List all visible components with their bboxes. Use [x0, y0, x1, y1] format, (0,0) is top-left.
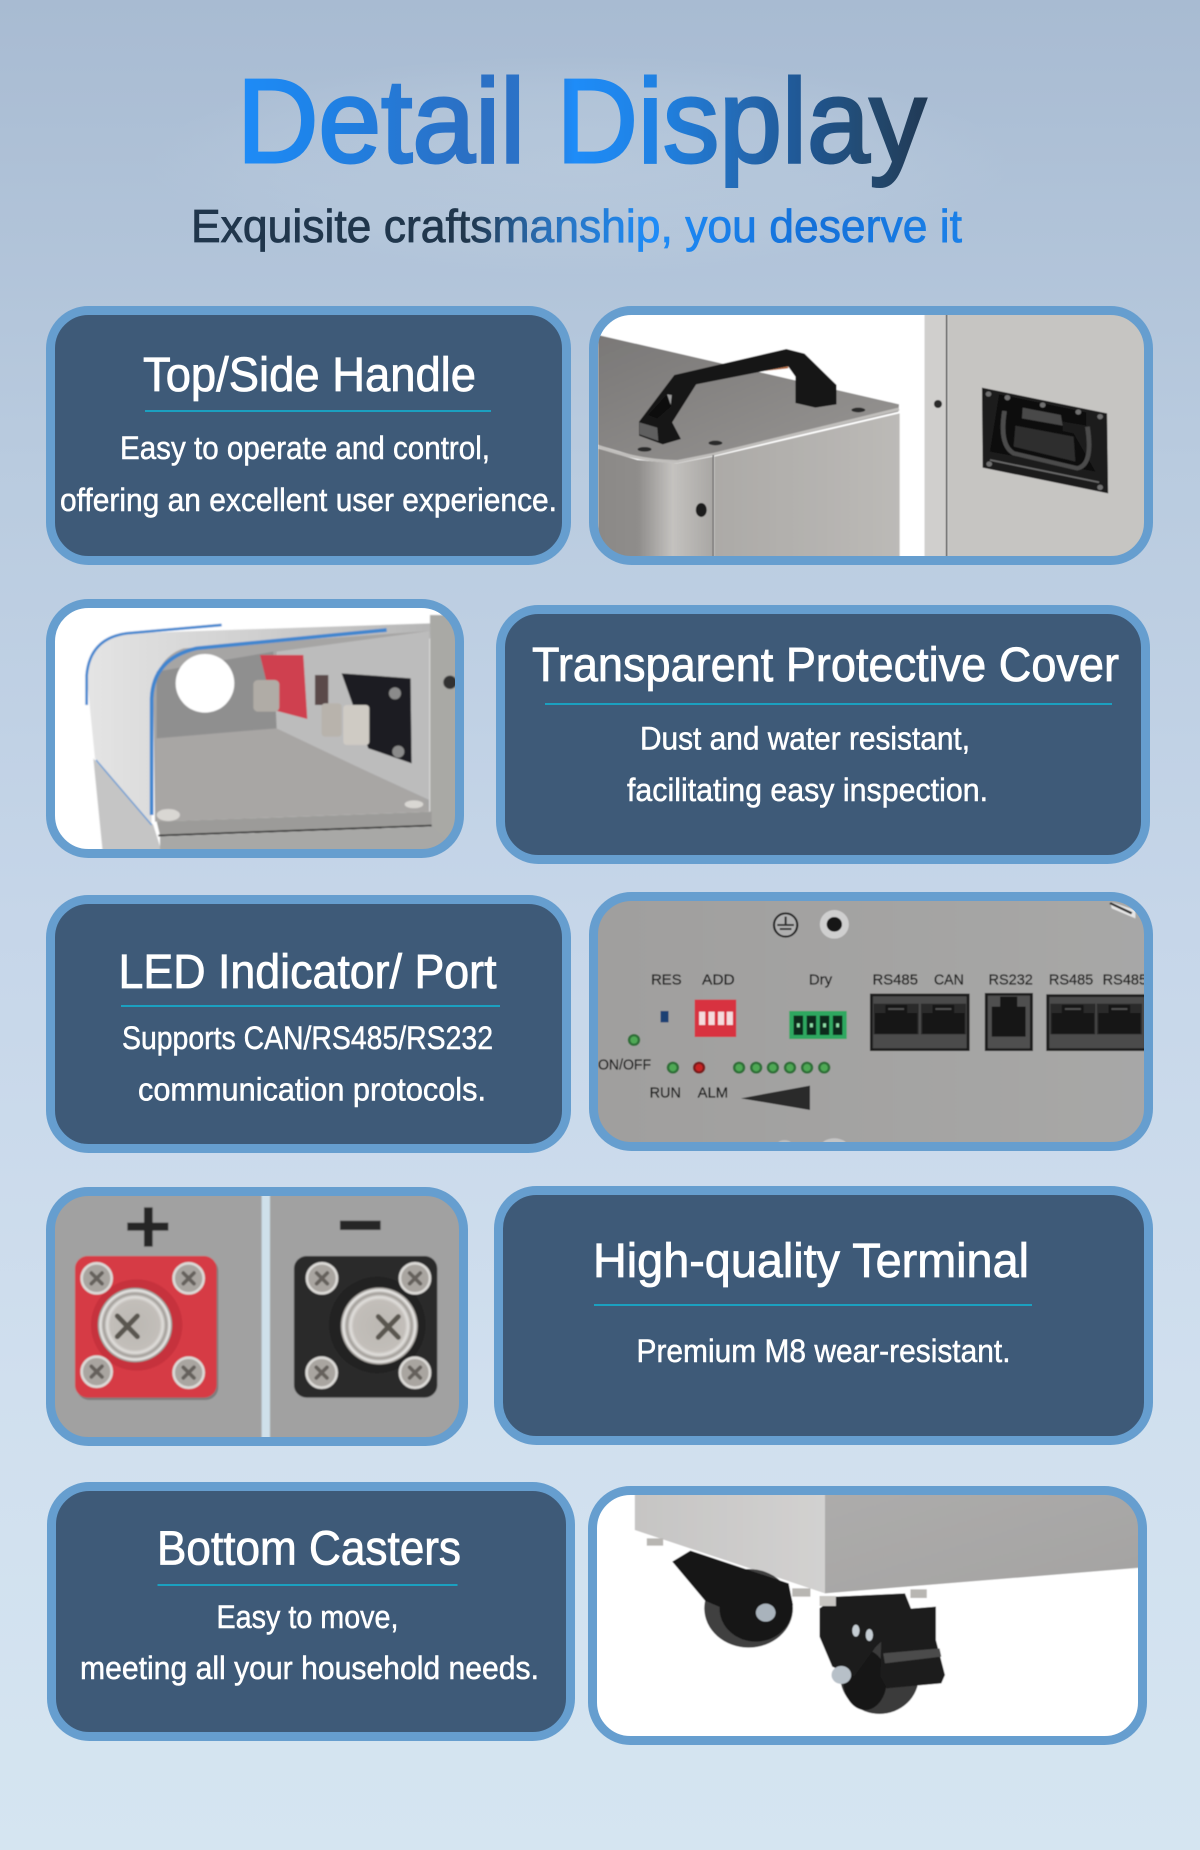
- heading: bottom casters: Bottom Casters: [157, 1522, 461, 1576]
- port labels: RS232: [989, 972, 1033, 988]
- panel: transparent protective cover text: [500, 610, 1146, 860]
- icon: red positive terminal: [75, 1256, 218, 1400]
- heading: top/side handle: Top/Side Handle: [143, 349, 476, 402]
- text: cover description: facilitating easy inspection.: [627, 772, 988, 808]
- text: casters description: meeting all your household needs.: [80, 1650, 539, 1686]
- port labels: ALM: [698, 1085, 728, 1101]
- text: handle description: [60, 430, 557, 518]
- icon: black negative terminal: [294, 1256, 437, 1398]
- text: LED description: [122, 1020, 493, 1108]
- icon: top handle enclosure: [598, 335, 900, 558]
- icon: side latch handle: [924, 315, 1144, 556]
- LED indicators: [628, 1034, 830, 1074]
- icon: ground screw and socket: [774, 910, 849, 939]
- icon: rear caster: [647, 1538, 810, 1648]
- icon: RS232 port: [985, 993, 1033, 1051]
- icon: DIP switch: [695, 1000, 736, 1037]
- port labels: ADD: [702, 972, 735, 988]
- text: LED description: communication protocols.: [138, 1072, 486, 1108]
- icon: minus sign: [340, 1221, 381, 1230]
- port labels: CAN: [934, 972, 964, 988]
- icon: front locking caster: [820, 1589, 945, 1714]
- icon: reset button: [661, 1011, 669, 1022]
- text: terminal description: Premium M8 wear-resistant.: [636, 1333, 1010, 1369]
- heading: LED indicator / port: LED Indicator/ Port: [118, 946, 496, 999]
- title: Detail Display: [237, 55, 926, 188]
- text: handle description: Easy to operate and control,: [120, 430, 490, 466]
- panel: port photo: [590, 895, 1160, 1155]
- panel: handle photo: [590, 305, 1166, 565]
- subtitle: Exquisite craftsmanship, you deserve it: [191, 200, 962, 252]
- text: cover description: [627, 720, 988, 808]
- icon: green dry contact connector: [789, 1011, 847, 1039]
- icon: RS485 ports: [1046, 994, 1146, 1051]
- icon: plus sign: [127, 1207, 168, 1247]
- text: LED description: Supports CAN/RS485/RS232: [122, 1020, 493, 1056]
- icon: SOC wedge: [741, 1086, 810, 1110]
- panel: top/side handle text: [50, 310, 566, 560]
- heading: high-quality terminal: High-quality Terminal: [593, 1235, 1029, 1288]
- panel: bottom casters text: [52, 1486, 570, 1736]
- panel: transparent cover photo: [40, 595, 470, 865]
- icon: cover enclosure: [87, 615, 460, 852]
- text: cover description: Dust and water resistant,: [640, 720, 970, 756]
- port labels: RS485: [1103, 972, 1147, 988]
- port labels: Dry: [809, 972, 832, 988]
- port labels: [598, 972, 1147, 1101]
- panel: LED indicator text: [50, 900, 566, 1148]
- heading: transparent protective cover: Transparent Protective Cover: [532, 639, 1119, 692]
- port labels: RUN: [650, 1085, 681, 1101]
- text: casters description: [80, 1599, 539, 1686]
- port labels: ON/OFF: [598, 1057, 651, 1073]
- panel: high-quality terminal text: [498, 1190, 1148, 1440]
- port labels: RS485: [873, 972, 918, 988]
- panel: terminal photo: [40, 1180, 480, 1450]
- icon: enclosure bottom: [635, 1493, 1145, 1593]
- panel: casters photo: [585, 1480, 1155, 1750]
- text: casters description: Easy to move,: [216, 1599, 398, 1635]
- port labels: RES: [651, 972, 682, 988]
- port labels: RS485: [1049, 972, 1093, 988]
- text: handle description: offering an excellent user experience.: [60, 482, 557, 518]
- icon: RS485 and CAN ports: [870, 994, 970, 1051]
